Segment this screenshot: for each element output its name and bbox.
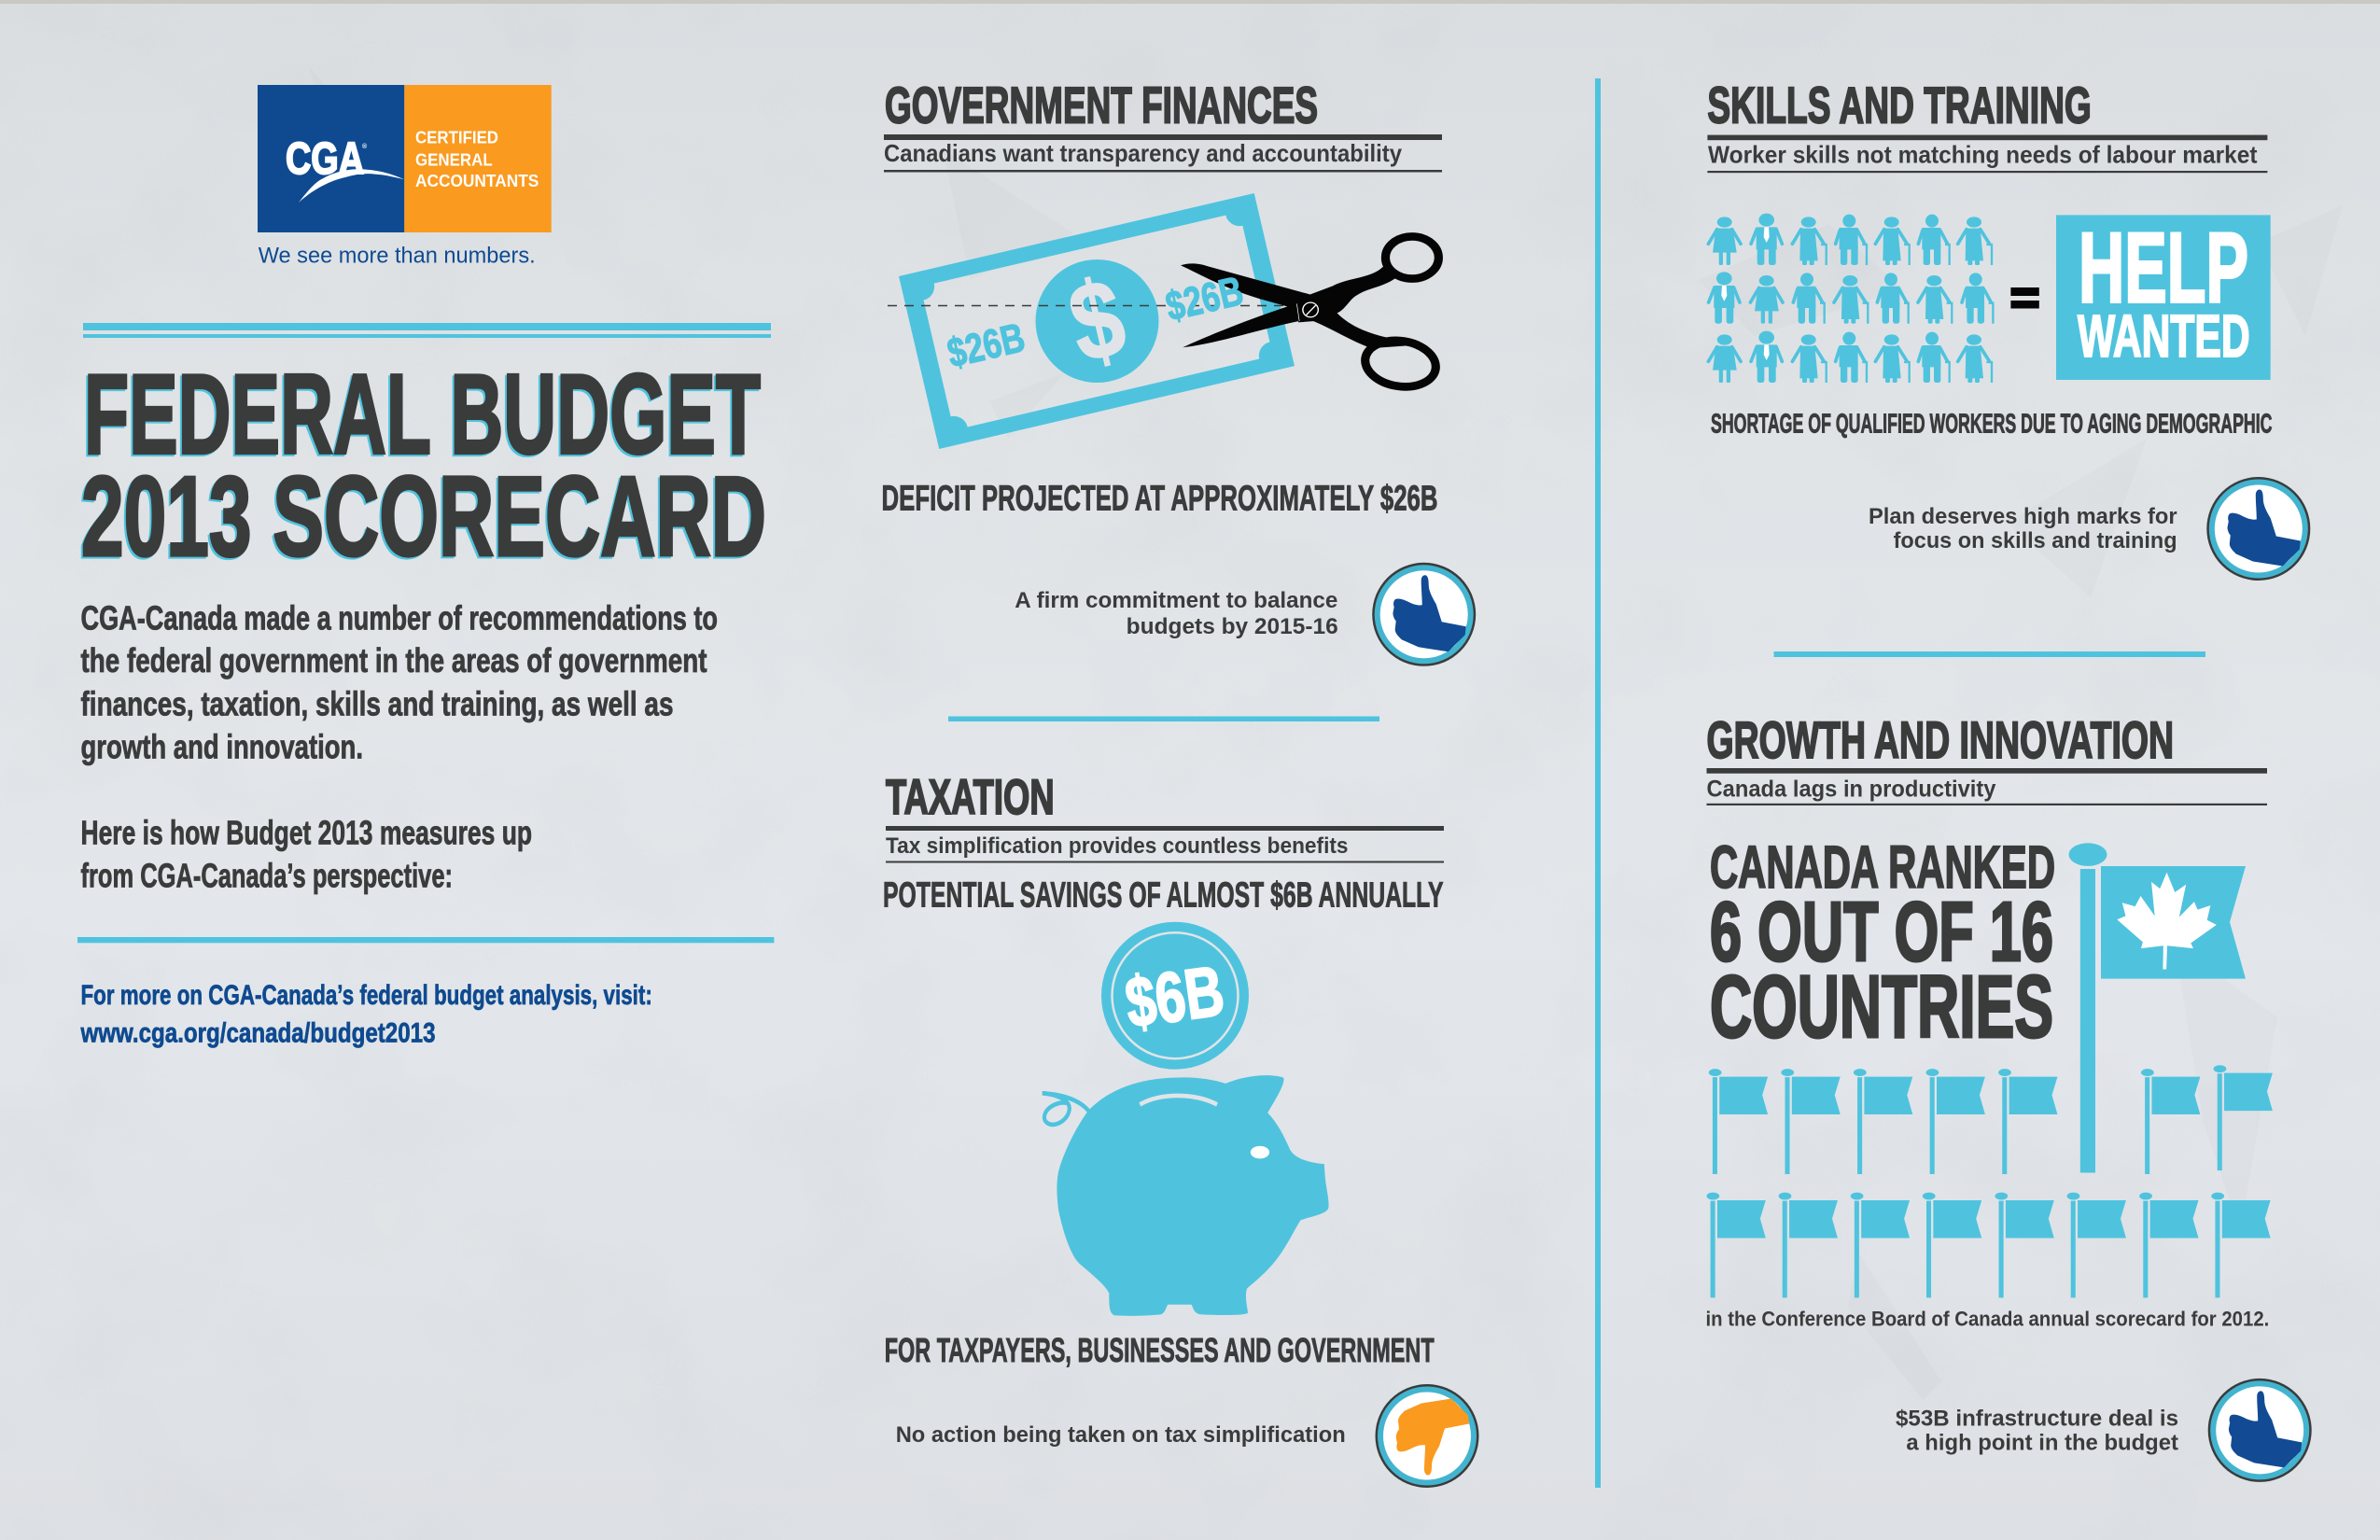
intro paragraph xyxy=(80,598,718,766)
panel: growth and innovation xyxy=(1706,710,2312,1482)
title: 2013 SCORECARD xyxy=(81,453,766,580)
subheading: Canada lags in productivity xyxy=(1706,776,1996,802)
icon: scissors xyxy=(1181,236,1439,392)
icon: thumbs up xyxy=(1372,563,1476,666)
caption: FOR TAXPAYERS, BUSINESSES AND GOVERNMENT xyxy=(885,1331,1435,1369)
verdict text: focus on skills and training xyxy=(1894,528,2177,553)
title xyxy=(81,351,766,580)
link text xyxy=(80,980,652,1049)
bill amount over blade: $26B xyxy=(1162,268,1248,330)
logo: CGA Certified General Accountants: We see more than numbers. xyxy=(259,244,536,269)
pictogram: workers grid xyxy=(1708,214,1993,383)
subheading: Worker skills not matching needs of labour market xyxy=(1708,140,2258,168)
icon: $6B coin: $6B xyxy=(1121,951,1229,1043)
title: FEDERAL BUDGET xyxy=(84,351,761,478)
intro paragraph: CGA-Canada made a number of recommendations to xyxy=(80,598,718,637)
icon: Canadian flag xyxy=(2068,843,2246,1172)
intro paragraph: the federal government in the areas of government xyxy=(80,641,707,679)
verdict text: A firm commitment to balance xyxy=(1015,588,1337,613)
intro paragraph: growth and innovation. xyxy=(80,728,363,766)
verdict text: Plan deserves high marks for xyxy=(1869,504,2177,529)
source caption: in the Conference Board of Canada annual scorecard for 2012. xyxy=(1706,1308,2269,1331)
icon: thumbs down xyxy=(1376,1384,1478,1488)
statistic caption: DEFICIT PROJECTED AT APPROXIMATELY $26B xyxy=(881,480,1437,519)
logo: CGA Certified General Accountants: CGA xyxy=(286,134,364,184)
verdict text: budgets by 2015-16 xyxy=(1127,614,1338,639)
dashed cut line xyxy=(888,304,1283,306)
panel: skills and training xyxy=(1707,77,2310,581)
help wanted sign xyxy=(2056,212,2271,380)
icon: piggy bank xyxy=(1043,1075,1329,1316)
verdict text: No action being taken on tax simplification xyxy=(896,1422,1346,1448)
illustration: banknote: $ xyxy=(1058,256,1136,386)
heading: GOVERNMENT FINANCES xyxy=(885,77,1318,134)
illustration: banknote xyxy=(899,193,1295,449)
illustration: banknote: $26B xyxy=(944,315,1029,377)
flags: sixteen countries xyxy=(1706,1065,2273,1297)
icon: thumbs up xyxy=(2208,1379,2312,1482)
help wanted sign: HELP xyxy=(2079,212,2248,324)
verdict text: $53B infrastructure deal is xyxy=(1896,1406,2178,1431)
logo: CGA Certified General Accountants: GENERAL xyxy=(415,150,493,169)
icon: $6B coin xyxy=(1101,922,1249,1070)
verdict text xyxy=(1896,1406,2178,1456)
logo: CGA Certified General Accountants xyxy=(258,85,552,269)
verdict text xyxy=(1015,588,1338,639)
logo: CGA Certified General Accountants: ACCOUNTANTS xyxy=(415,172,539,190)
ranking statement: CANADA RANKED xyxy=(1710,833,2055,901)
panel: government finances xyxy=(881,77,1476,666)
link text: For more on CGA-Canada’s federal budget analysis, visit: xyxy=(80,980,652,1011)
ranking statement xyxy=(1710,833,2055,1057)
panel: taxation xyxy=(883,770,1478,1488)
heading: TAXATION xyxy=(886,770,1055,825)
verdict text xyxy=(1869,504,2177,553)
help wanted sign: WANTED xyxy=(2078,302,2250,370)
ranking statement: COUNTRIES xyxy=(1710,958,2053,1057)
statistic caption: POTENTIAL SAVINGS OF ALMOST $6B ANNUALLY xyxy=(883,875,1443,915)
logo: CGA Certified General Accountants: ® xyxy=(362,143,368,150)
lead-in text: Here is how Budget 2013 measures up xyxy=(80,813,532,851)
lead-in text: from CGA-Canada’s perspective: xyxy=(80,856,453,894)
icon: thumbs up xyxy=(2206,477,2310,581)
equals sign xyxy=(2010,287,2039,308)
double rule xyxy=(83,323,771,338)
verdict text: a high point in the budget xyxy=(1906,1431,2178,1456)
ranking statement: 6 OUT OF 16 xyxy=(1710,886,2053,979)
subheading: Canadians want transparency and accountability xyxy=(884,139,1402,167)
logo: CGA Certified General Accountants: CERTIFIED xyxy=(415,128,498,147)
intro paragraph: finances, taxation, skills and training, as well as xyxy=(80,685,674,723)
panel: introduction column xyxy=(77,85,774,1049)
heading: SKILLS AND TRAINING xyxy=(1707,77,2092,134)
subheading: Tax simplification provides countless benefits xyxy=(886,833,1348,859)
link text: www.cga.org/canada/budget2013 xyxy=(80,1018,435,1049)
lead-in text xyxy=(80,813,532,894)
